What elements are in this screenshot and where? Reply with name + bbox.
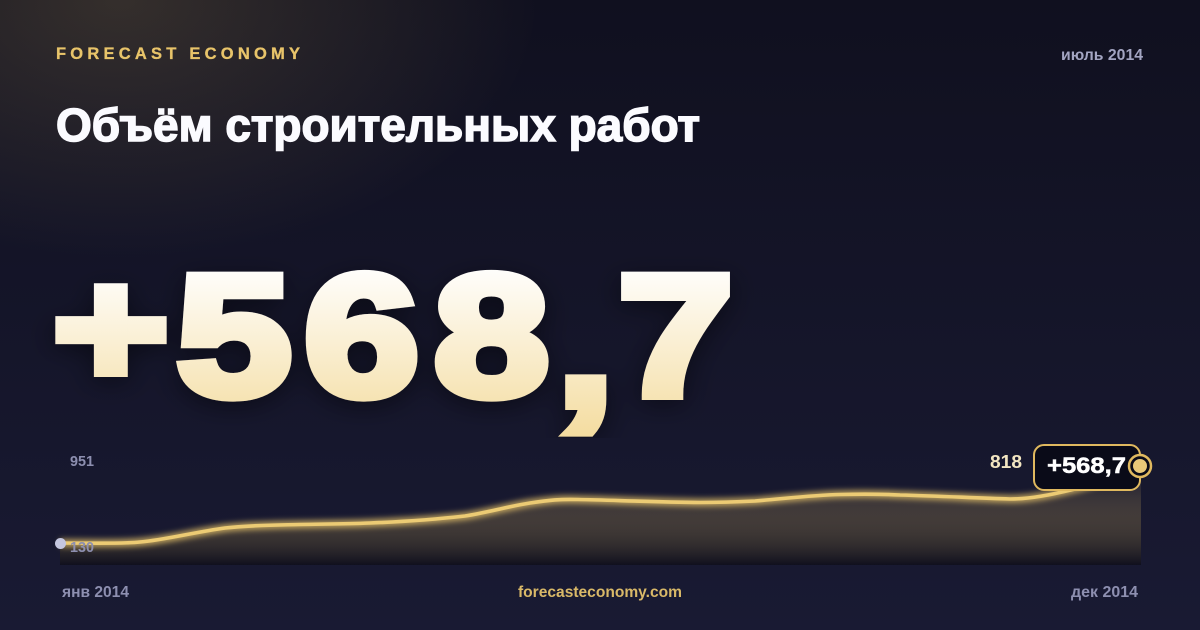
end date label: дек 2014 [1071, 584, 1138, 601]
big number: 568,7 [177, 240, 733, 442]
big number: + [53, 236, 169, 420]
date label: июль 2014 [1061, 47, 1143, 64]
end value label: 818 [990, 452, 1022, 472]
start point marker [55, 538, 66, 549]
end point marker [1129, 455, 1151, 477]
axis max label: 951 [70, 454, 94, 470]
title: Объём строительных работ [56, 99, 700, 151]
value callout [1034, 445, 1140, 490]
chart line [60, 466, 1141, 543]
chart area fill [60, 466, 1141, 565]
chart line glow [60, 466, 1141, 543]
start date label: янв 2014 [62, 584, 129, 601]
site url: forecasteconomy.com [518, 584, 682, 601]
value callout: +568,7 [1047, 453, 1126, 478]
axis min label: 130 [70, 540, 94, 556]
brand label: FORECAST ECONOMY [56, 45, 300, 63]
line chart [60, 466, 1141, 565]
